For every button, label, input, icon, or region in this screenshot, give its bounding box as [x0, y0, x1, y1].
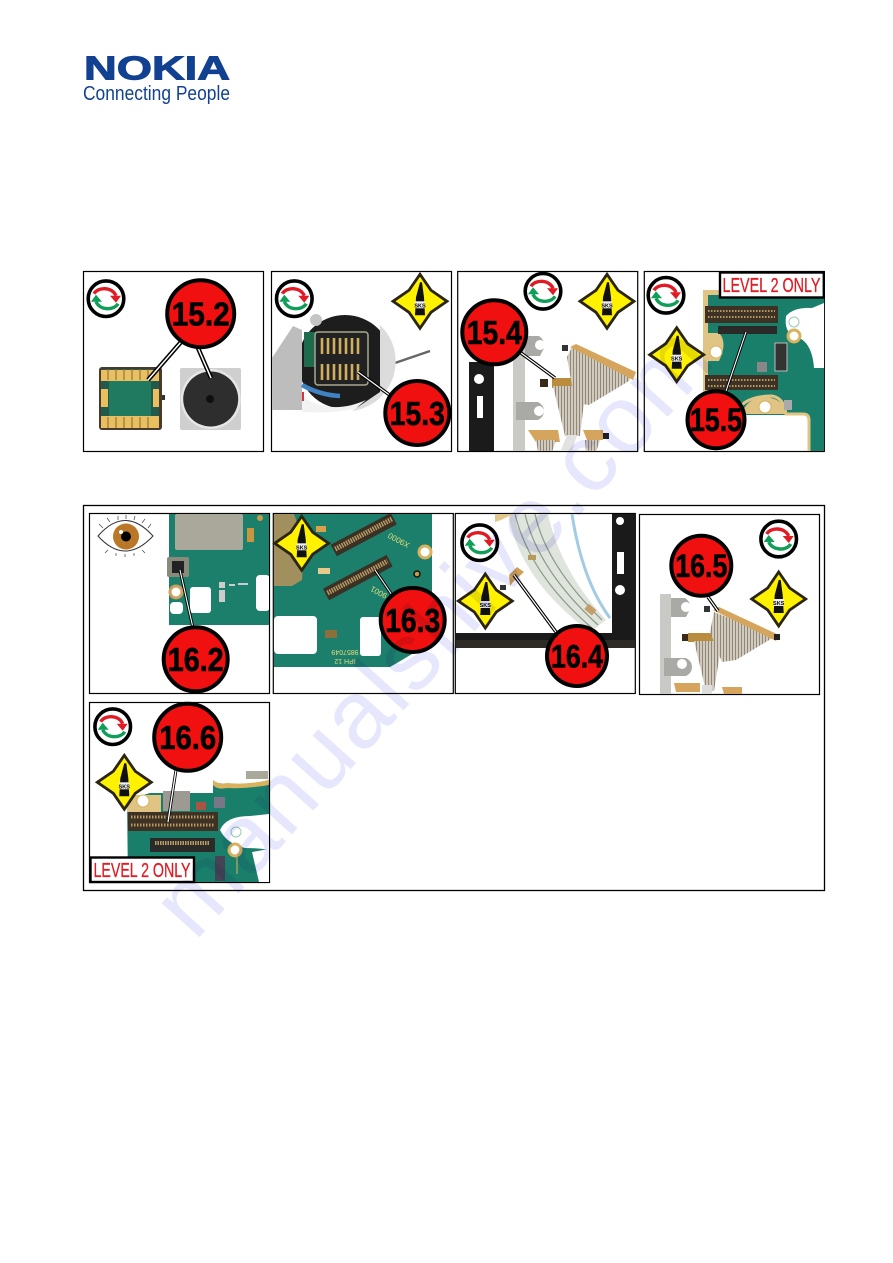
panel: step 16.3 — [273, 513, 453, 694]
photo: camera module — [180, 368, 241, 430]
label: level 2 only: LEVEL 2 ONLY — [94, 860, 190, 882]
icon: grease star — [393, 274, 447, 328]
icon: rotate arrows — [648, 278, 684, 313]
callout: 16.6 — [154, 704, 221, 771]
icon: grease star: SKS — [671, 357, 683, 363]
photo: board connectors — [127, 771, 269, 882]
label: level 2 only: LEVEL 2 ONLY — [722, 275, 820, 297]
logo: Nokia Connecting People: NOKIA — [84, 50, 230, 86]
label: level 2 only — [90, 858, 194, 882]
icon: grease star — [275, 516, 329, 570]
photo: contact chip — [99, 367, 165, 430]
callout: 16.3 — [381, 588, 445, 652]
logo: Nokia Connecting People: Connecting People — [83, 83, 230, 105]
panel: step 16.2 — [90, 514, 270, 694]
icon: grease star: SKS — [119, 784, 130, 790]
icon: eye — [98, 515, 153, 557]
callout: 15.4 — [462, 300, 526, 364]
photo: board connectors: IPH 12 — [334, 657, 356, 664]
callout: 16.4 — [547, 626, 607, 686]
panel: step 16.4 — [455, 514, 635, 694]
icon: grease star — [752, 572, 806, 626]
icon: grease star — [97, 755, 151, 809]
icon: grease star — [458, 574, 512, 628]
leader line — [521, 353, 555, 378]
photo: board connectors: 9857049 — [331, 648, 359, 655]
watermark: manualshive.com — [131, 305, 733, 956]
icon: grease star: SKS — [480, 603, 491, 609]
leader line — [725, 332, 746, 394]
icon: grease star — [580, 274, 634, 328]
icon: rotate arrows — [525, 274, 561, 309]
photo: circuit board — [703, 290, 824, 451]
panel: step 16.6 — [90, 702, 270, 882]
icon: grease star: SKS — [414, 303, 426, 309]
logo: Nokia Connecting People — [83, 50, 230, 105]
leader line — [514, 575, 556, 632]
callout: 15.2 — [167, 280, 234, 347]
leader line — [358, 372, 391, 396]
photo: frame and cable fan — [456, 514, 635, 648]
panel: step 15.5 — [644, 272, 824, 452]
callout: 16.3: 16.3 — [385, 602, 440, 639]
callout: 15.4: 15.4 — [467, 314, 522, 351]
callout: 16.4: 16.4 — [551, 638, 603, 674]
icon: rotate arrows — [761, 521, 796, 557]
icon: grease star: SKS — [296, 545, 308, 551]
callout: 16.5: 16.5 — [675, 548, 727, 584]
leader line — [168, 770, 176, 822]
leader lines — [148, 342, 211, 380]
panel: step 15.3 — [272, 272, 452, 452]
icon: rotate arrows — [462, 525, 498, 560]
callout: 15.3 — [385, 381, 449, 445]
callout: 15.3: 15.3 — [390, 395, 445, 432]
label: level 2 only — [720, 272, 824, 298]
photo: flex cables and frame — [469, 335, 636, 455]
photo: camera connector — [272, 314, 430, 413]
icon: rotate arrows — [88, 281, 124, 316]
callout: 16.6: 16.6 — [159, 719, 216, 756]
leader line — [375, 570, 392, 595]
callout: 15.5 — [688, 391, 744, 448]
photo: board connectors: 9001 — [368, 584, 389, 600]
icon: grease star: SKS — [601, 303, 613, 309]
panel: section 16 frame — [84, 506, 824, 890]
callout: 16.2 — [164, 627, 228, 691]
panel: step 16.5 — [640, 514, 820, 694]
panel: step 15.4 — [458, 272, 638, 455]
callout: 16.2: 16.2 — [168, 641, 224, 678]
photo: board connectors — [274, 513, 432, 667]
photo: flex cables — [660, 594, 780, 694]
leader line — [180, 570, 193, 628]
icon: rotate arrows — [95, 709, 130, 744]
leader line — [708, 597, 718, 611]
callout: 15.2: 15.2 — [172, 296, 230, 332]
callout: 16.5 — [671, 536, 731, 596]
photo: board with sensor — [167, 514, 270, 625]
photo: board connectors: X9000 — [386, 531, 411, 550]
callout: 15.5: 15.5 — [690, 402, 742, 438]
icon: grease star — [650, 328, 704, 382]
icon: grease star: SKS — [773, 601, 785, 607]
icon: rotate arrows — [276, 281, 312, 316]
panel: step 15.2 — [84, 272, 264, 452]
